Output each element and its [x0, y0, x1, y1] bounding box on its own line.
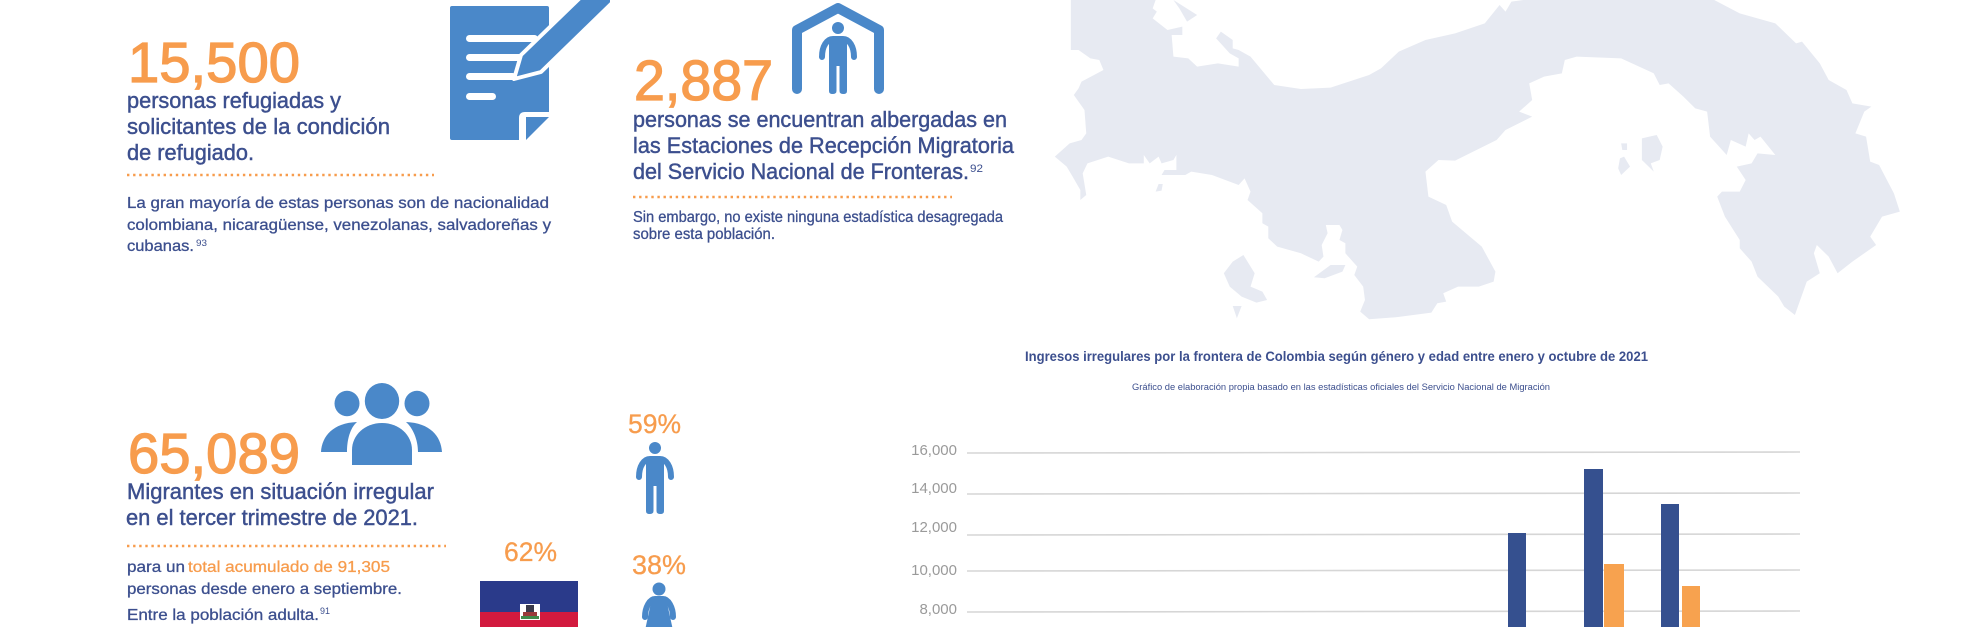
migrants description: personas desde enero a septiembre.: [127, 581, 402, 598]
icon: flag of Haiti: [480, 581, 578, 627]
y axis labels: [911, 442, 957, 618]
migrants description: [127, 559, 402, 624]
label: 38% women: 38%: [632, 550, 686, 580]
y axis labels: 14,000: [911, 480, 957, 497]
y axis labels: 10,000: [911, 562, 957, 579]
label: 59% men: 59%: [628, 409, 681, 439]
bar chart: irregular entries: [911, 349, 1800, 627]
migrants description: total acumulado de 91,305: [188, 559, 390, 576]
icon: document and pen: [450, 0, 612, 140]
label: 62%: 62%: [504, 537, 557, 567]
migrants heading: [126, 479, 434, 530]
shelter description: sobre esta población.: [633, 226, 775, 243]
shelter heading: personas se encuentran albergadas en: [633, 107, 1007, 132]
number: 15,500: 15,500: [128, 31, 300, 95]
refugee description: colombiana, nicaragüense, venezolanas, salvadoreñas y: [127, 217, 551, 234]
refugee description: cubanas.: [127, 238, 194, 255]
refugee heading: solicitantes de la condición: [127, 114, 390, 139]
shelter heading: 92: [970, 163, 983, 175]
number: 2,887: 2,887: [634, 49, 773, 113]
y axis labels: 8,000: [919, 601, 957, 618]
refugee heading: de refugiado.: [127, 140, 254, 165]
bars: [1508, 469, 1700, 627]
refugee heading: [127, 88, 390, 165]
panel: shelter statistic: [633, 8, 1015, 243]
migrants heading: Migrantes en situación irregular: [127, 479, 434, 504]
shelter description: Sin embargo, no existe ninguna estadística desagregada: [633, 209, 1003, 226]
number: 65,089: 65,089: [128, 422, 300, 486]
migrants description: 91: [320, 606, 330, 616]
refugee description: La gran mayoría de estas personas son de nacionalidad: [127, 195, 549, 212]
refugee heading: personas refugiadas y: [127, 88, 341, 113]
refugee description: 93: [196, 238, 207, 248]
panel: irregular migrants statistic: [126, 383, 446, 624]
migrants heading: en el tercer trimestre de 2021.: [126, 505, 418, 530]
icon: man: [639, 442, 671, 514]
migrants description: para un: [127, 559, 185, 576]
chart subtitle: Gráfico de elaboración propia basado en las estadísticas oficiales del Servicio Nacional de Migración: [1132, 382, 1550, 392]
shelter heading: [633, 107, 1015, 184]
migrants description: Entre la población adulta.: [127, 607, 319, 624]
icon: woman: [644, 582, 674, 627]
panel: refugee statistic: [127, 0, 612, 255]
map of Panama: [1055, 0, 1900, 319]
shelter description: [633, 209, 1003, 243]
shelter heading: del Servicio Nacional de Fronteras.: [633, 159, 969, 184]
icon: person in house: [797, 8, 879, 94]
y axis labels: 16,000: [911, 442, 957, 459]
refugee description: [127, 195, 551, 255]
chart title: Ingresos irregulares por la frontera de Colombia según género y edad entre enero y octubre de 2021: [1025, 349, 1648, 364]
shelter heading: las Estaciones de Recepción Migratoria: [633, 133, 1015, 158]
y axis labels: 12,000: [911, 519, 957, 536]
icon: group of people: [321, 383, 442, 465]
